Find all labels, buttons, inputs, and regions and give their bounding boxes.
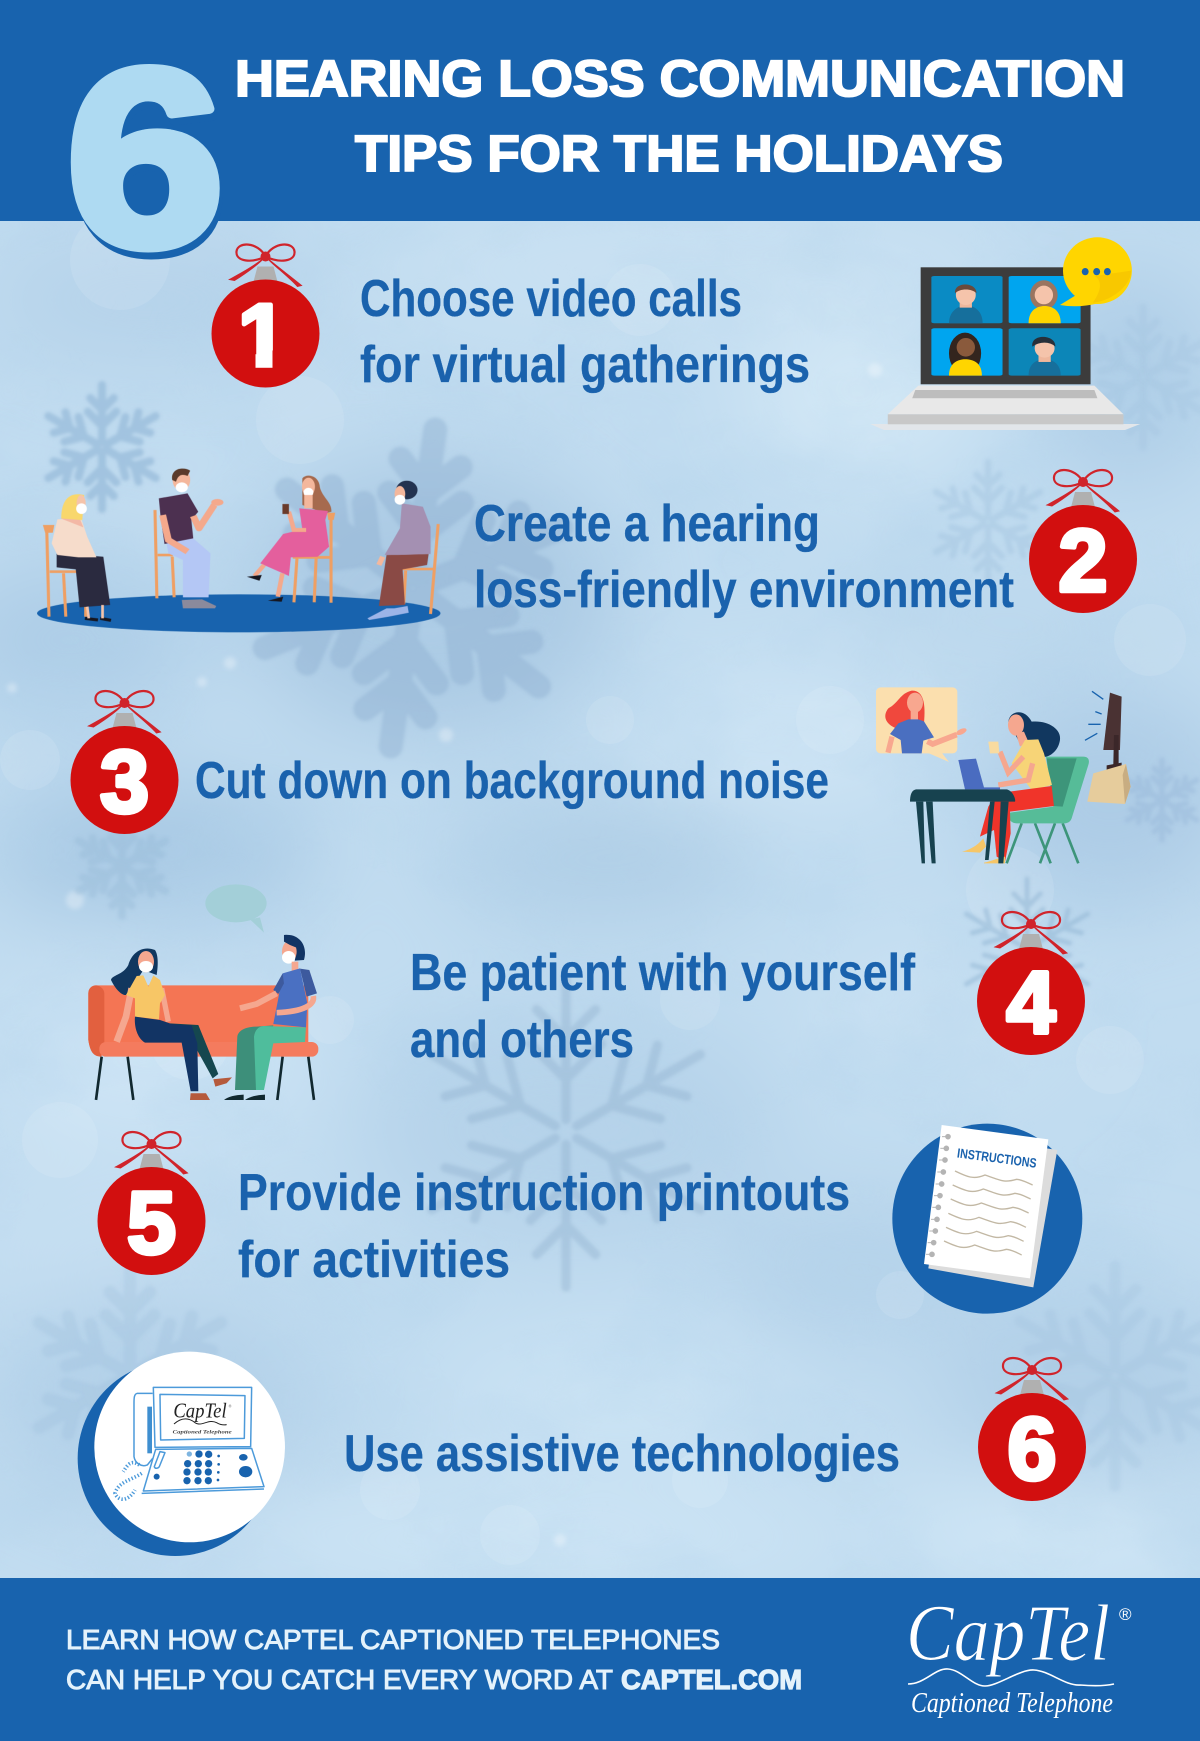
title: HEARING LOSS COMMUNICATION	[235, 50, 1125, 107]
tip 1 text	[360, 270, 810, 394]
tip 4 text: Be patient with yourself	[410, 944, 916, 1002]
ornament number 3	[70, 691, 178, 834]
tip 5 text: Provide instruction printouts	[238, 1164, 850, 1222]
speech bubble with caller	[876, 687, 968, 762]
phone screen logo	[173, 1398, 232, 1435]
woman at laptop	[962, 712, 1060, 863]
speech bubble	[1060, 237, 1132, 306]
tip 2 text: loss-friendly environment	[474, 561, 1014, 619]
tip 5 text: for activities	[238, 1231, 510, 1289]
ornament number 1: 1	[238, 286, 287, 384]
illustration: two people on orange couch	[88, 884, 318, 1100]
person: man gesturing	[155, 468, 223, 608]
ornament number 6: 6	[1008, 1399, 1056, 1498]
footer call to action	[66, 1624, 802, 1695]
tip 2 text	[474, 495, 1014, 619]
person tile 4	[1029, 337, 1061, 376]
person tile 2	[1029, 280, 1061, 323]
tip 5 text	[238, 1164, 850, 1289]
person tile 1	[949, 285, 983, 323]
tip 3 text: Cut down on background noise	[195, 752, 829, 810]
footer band	[0, 1578, 1200, 1741]
notebook heading: INSTRUCTIONS	[956, 1145, 1038, 1171]
tip 6 text: Use assistive technologies	[344, 1425, 900, 1483]
illustration: laptop video call	[870, 237, 1140, 430]
illustration: CapTel phone in circle	[78, 1352, 285, 1556]
CapTel logo: Captioned Telephone	[911, 1688, 1113, 1719]
person tile 3	[949, 333, 982, 376]
ornament number 2	[1029, 470, 1137, 613]
phone screen logo: Captioned Telephone	[173, 1429, 232, 1435]
speech bubble	[205, 884, 267, 933]
couch	[88, 985, 318, 1100]
footer call to action: CAPTEL.COM	[621, 1664, 802, 1695]
ornament number 3: 3	[100, 732, 149, 831]
footer call to action: LEARN HOW CAPTEL CAPTIONED TELEPHONES	[66, 1624, 720, 1655]
man on couch	[224, 935, 317, 1100]
title	[235, 50, 1125, 182]
notebook lines	[944, 1171, 1033, 1255]
phone screen logo: ®	[229, 1404, 232, 1409]
ornament number 6	[978, 1358, 1086, 1501]
tip 1 text: Choose video calls	[360, 270, 742, 328]
ornament number 5: 5	[127, 1173, 176, 1272]
desk and laptop	[910, 759, 1015, 863]
television on stand	[1085, 691, 1131, 804]
tip 4 text: and others	[410, 1011, 634, 1069]
tip 4 text	[410, 944, 916, 1069]
ornament number 4	[977, 912, 1085, 1055]
person: blonde woman on chair	[43, 494, 111, 620]
phone line art	[115, 1387, 264, 1499]
keypad	[154, 1450, 252, 1484]
ornament number 2: 2	[1059, 511, 1107, 610]
tip 2 text: Create a hearing	[474, 495, 820, 553]
woman on couch	[111, 949, 232, 1100]
CapTel logo: CapTel	[906, 1590, 1110, 1678]
CapTel logo	[906, 1590, 1132, 1719]
chair	[1007, 757, 1089, 863]
big number 6: 6	[66, 17, 224, 298]
footer call to action: CAN HELP YOU CATCH EVERY WORD AT	[66, 1664, 613, 1695]
illustration: instructions notebook on blue circle	[892, 1124, 1082, 1314]
illustration: woman at desk with video chat	[876, 687, 1131, 863]
title: TIPS FOR THE HOLIDAYS	[355, 125, 1003, 182]
tip 1 text: for virtual gatherings	[360, 336, 810, 394]
ornament number 1	[212, 245, 320, 388]
person: woman in pink dress	[247, 476, 335, 603]
ornament number 5	[98, 1132, 206, 1275]
big number 6: 6	[69, 24, 227, 305]
ornament number 4: 4	[1007, 953, 1056, 1052]
spiral binding	[926, 1134, 950, 1257]
CapTel logo: ®	[1119, 1605, 1132, 1624]
illustration: group seated on blue rug	[37, 468, 440, 632]
phone screen logo: CapTel	[173, 1398, 227, 1422]
rug	[37, 594, 440, 632]
header band	[0, 0, 1200, 221]
person: man on right side	[367, 481, 438, 620]
